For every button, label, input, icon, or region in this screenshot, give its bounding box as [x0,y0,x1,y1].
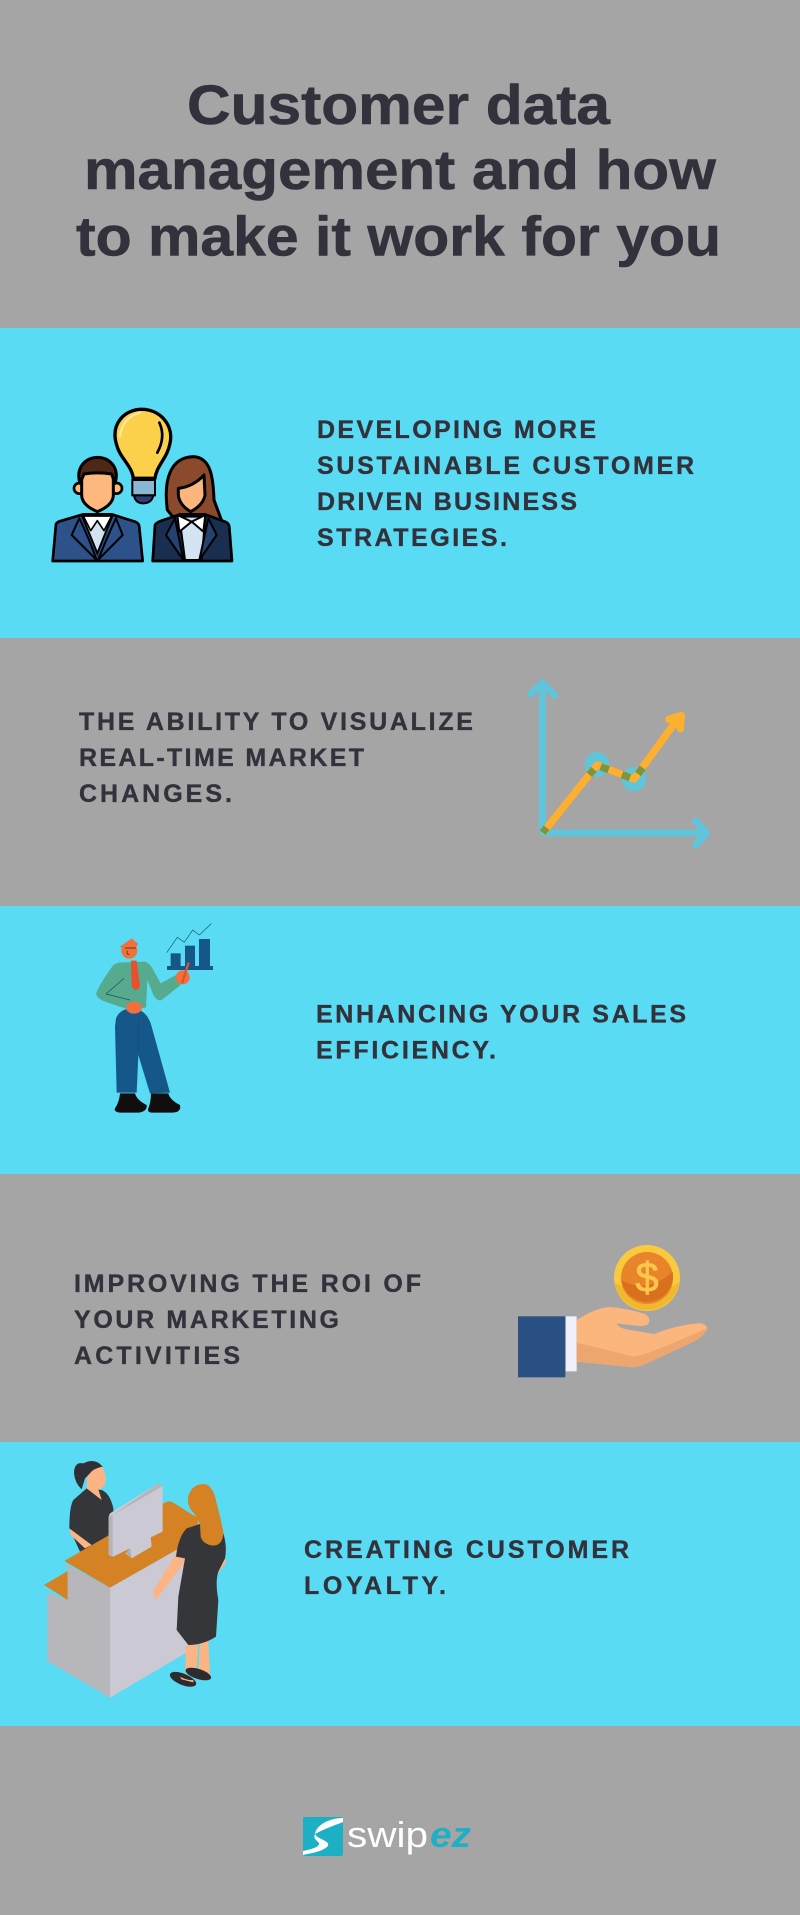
title: management and how [84,138,716,201]
icon: two business people and light bulb [53,409,232,561]
text: customer loyalty [304,1536,629,1600]
man [53,514,143,561]
woman [166,457,222,522]
title [76,73,721,268]
panel: title [0,0,800,328]
text: market changes: REAL-TIME MARKET [79,744,364,772]
text: marketing ROI: ACTIVITIES [74,1342,240,1370]
icon: line chart with arrows [531,683,707,845]
text: developing strategies: DEVELOPING MORE [317,416,596,444]
text: marketing ROI [74,1270,421,1370]
icon: customer at reception desk [44,1461,227,1698]
logo: swipez [303,1814,471,1856]
logo: swipez: ez [430,1814,471,1855]
text: market changes: THE ABILITY TO VISUALIZE [79,708,473,736]
panel: customer loyalty [0,1442,800,1726]
icon: man presenting bar chart [96,924,213,1113]
text: customer loyalty: CREATING CUSTOMER [304,1536,629,1564]
text: developing strategies: STRATEGIES. [317,524,507,552]
panel: visualize market changes [0,638,800,906]
logo: swipez: swip [347,1814,428,1855]
text: developing strategies: SUSTAINABLE CUSTOMER [317,452,694,480]
panel: sales efficiency [0,906,800,1174]
text: developing strategies: DRIVEN BUSINESS [317,488,577,516]
icon: hand with dollar coin [518,1245,707,1377]
text: marketing ROI: YOUR MARKETING [74,1306,339,1334]
icon: hand with dollar coin: $ [635,1254,659,1301]
text: sales efficiency: EFFICIENCY. [316,1036,496,1064]
text: marketing ROI: IMPROVING THE ROI OF [74,1270,421,1298]
text: sales efficiency: ENHANCING YOUR SALES [316,1000,686,1028]
title: Customer data [187,73,611,136]
text: sales efficiency [316,1000,686,1064]
title: to make it work for you [76,204,721,268]
text: market changes: CHANGES. [79,780,232,808]
panel: sustainable strategies [0,328,800,638]
text: customer loyalty: LOYALTY. [304,1572,446,1600]
panel: marketing ROI [0,1174,800,1442]
text: developing strategies [317,416,694,552]
text: market changes [79,708,473,808]
panel: footer [0,1726,800,1915]
